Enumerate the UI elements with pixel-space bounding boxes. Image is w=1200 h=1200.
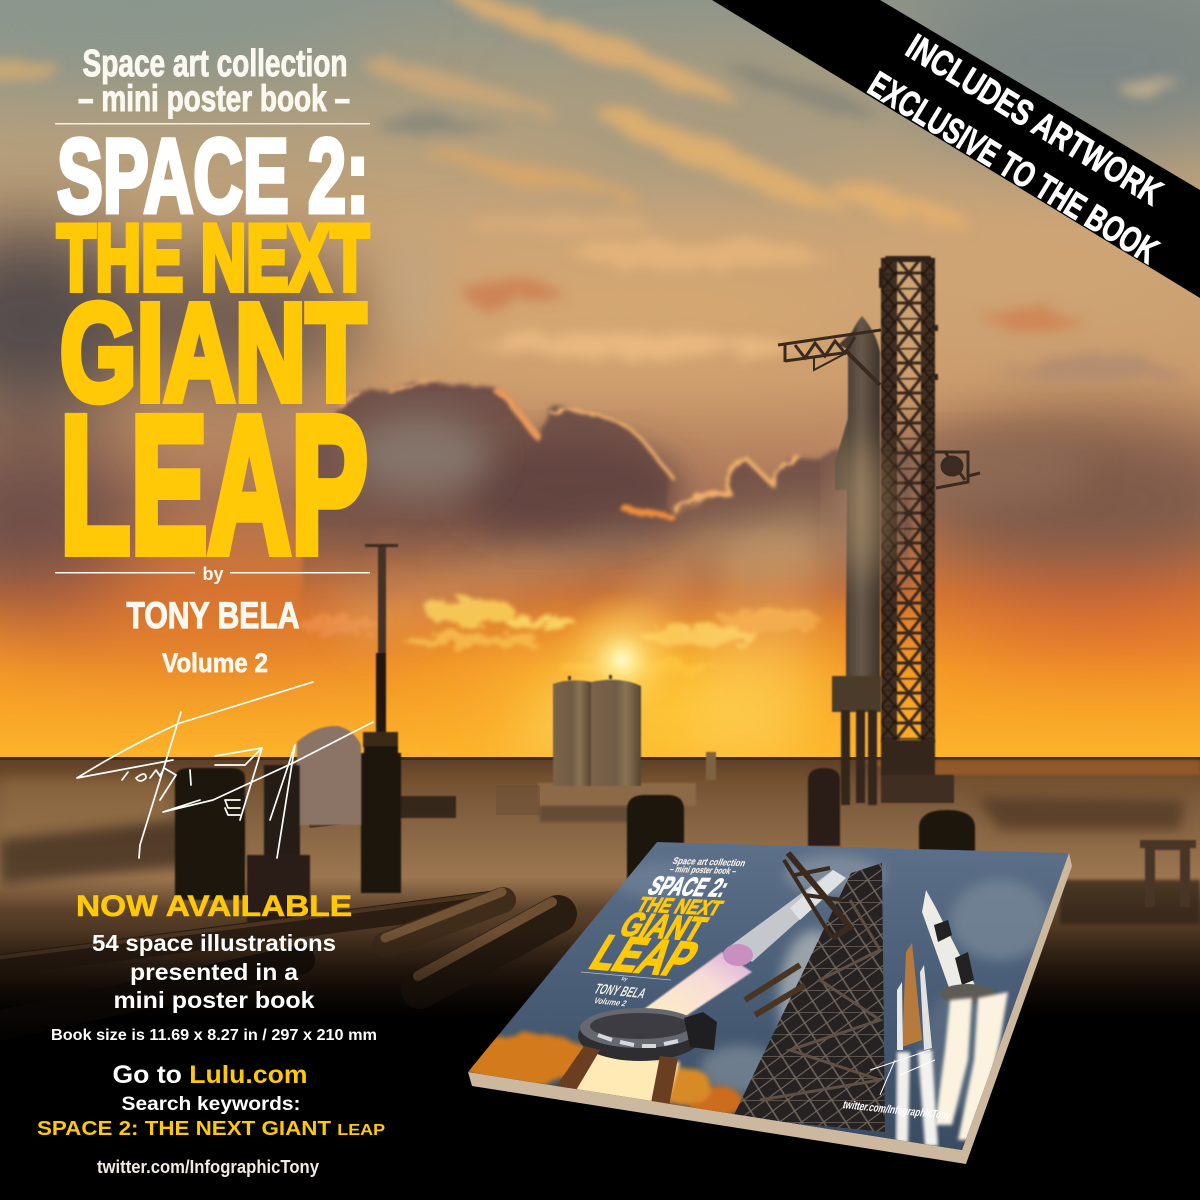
heading: series line: – mini poster book – [78, 78, 350, 119]
launch mount mast and pad structures left [175, 544, 401, 935]
ground plain [0, 758, 1200, 1200]
cover title [580, 871, 734, 987]
cover title: THE NEXT [632, 893, 727, 920]
upper sky colour masses [0, 0, 1200, 745]
main title: SPACE 2: [57, 118, 369, 235]
book page edges [468, 853, 1072, 1164]
chopstick arm [778, 330, 881, 385]
main title: LEAP [60, 376, 368, 594]
availability text: mini poster book [114, 987, 315, 1013]
cover engine blast [568, 1054, 682, 1104]
rocket body [835, 316, 880, 710]
pipes [0, 892, 558, 1030]
rule under series line [55, 123, 370, 124]
cover clouds [610, 855, 1050, 1110]
byline [55, 564, 370, 678]
ribbon banner [712, 0, 1200, 298]
availability text [51, 890, 377, 1044]
cover twitter credit: twitter.com/InfographicTony [841, 1098, 953, 1122]
storage tanks [553, 675, 716, 786]
signature [77, 682, 373, 858]
byline: TONY BELA [126, 595, 300, 636]
byline: by [202, 564, 224, 584]
cover tower [733, 853, 885, 1132]
book mockup [462, 842, 1072, 1164]
cover title: GIANT [613, 905, 714, 948]
upper arm on right [935, 452, 980, 488]
heading: series line: Space art collection [82, 43, 348, 85]
lit low clouds and sun [300, 592, 822, 694]
cover SLS rocket [896, 943, 938, 1146]
cover byline [581, 972, 671, 1008]
cover Starship [723, 870, 846, 966]
cover byline: Volume 2 [592, 996, 629, 1008]
cover byline: by [620, 976, 629, 982]
cover Saturn V [922, 890, 1008, 1140]
book mockup: – mini poster book – [668, 864, 738, 876]
big sunset cloud [300, 378, 1090, 620]
cover series text: Space art collection [671, 856, 747, 869]
heading: series line [78, 43, 350, 119]
pale light shaft in sky [389, 230, 441, 350]
haze on rocket [836, 440, 888, 580]
availability text: Book size is 11.69 x 8.27 in / 297 x 210 mm [51, 1027, 377, 1044]
bottom fade to black [0, 930, 1200, 1200]
availability text: presented in a [130, 959, 298, 985]
cover fire [462, 1034, 743, 1118]
launch mount legs and base [832, 676, 954, 805]
cover byline: TONY BELA [591, 981, 649, 1002]
book cover [462, 842, 1069, 1150]
purchase instructions: twitter.com/InfographicTony [97, 1157, 319, 1177]
ground detail bands [0, 757, 1200, 924]
streak clouds [0, 0, 1184, 380]
cloud lit rim [340, 378, 798, 517]
cover launch ring [555, 1008, 717, 1112]
purchase instructions: SPACE 2: THE NEXT GIANT LEAP [37, 1118, 385, 1140]
launch tower and Starship rocket [778, 256, 980, 805]
dark posts on pad [627, 768, 1196, 907]
cover title: SPACE 2: [643, 871, 734, 902]
main title: THE NEXT [57, 205, 369, 310]
sky background [0, 0, 1200, 760]
cover signature [870, 1050, 935, 1095]
light rays [330, 500, 830, 760]
availability text: 54 space illustrations [92, 930, 336, 956]
byline: Volume 2 [162, 648, 268, 678]
cover title: LEAP [580, 926, 708, 987]
main title [57, 118, 369, 594]
launch tower [879, 256, 938, 742]
purchase instructions: Go to Lulu.com [112, 1061, 308, 1089]
purchase instructions [37, 1061, 385, 1177]
main title: GIANT [60, 276, 366, 430]
cover exhaust plume [640, 952, 752, 1020]
availability text: NOW AVAILABLE [76, 890, 352, 923]
purchase instructions: Search keywords: [122, 1093, 300, 1115]
